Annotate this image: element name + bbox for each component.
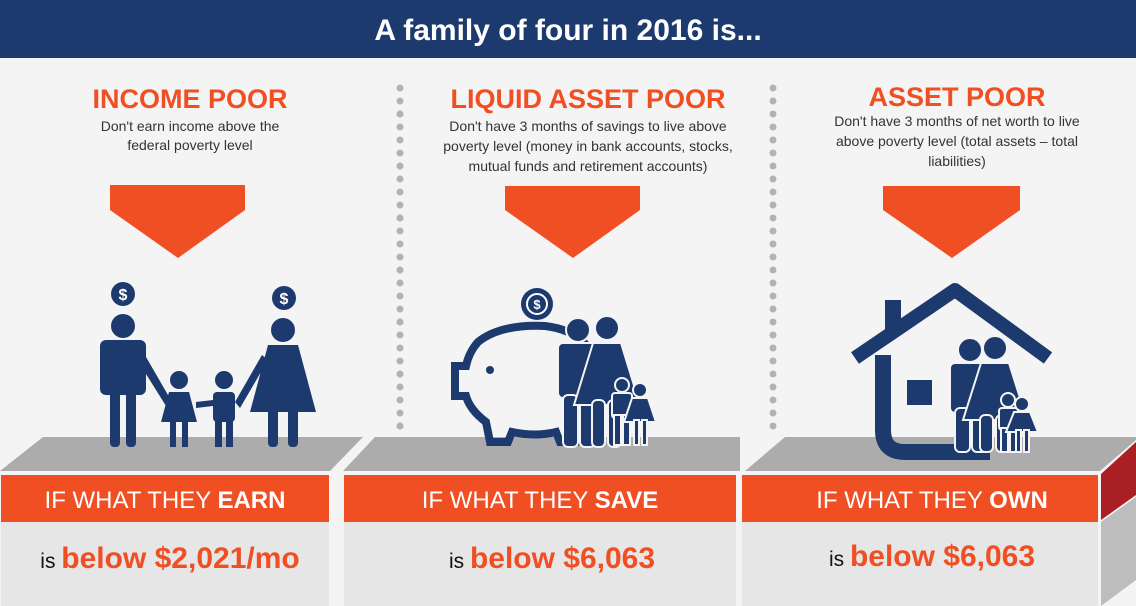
description: Don't earn income above the [101, 118, 279, 134]
box: own [742, 475, 1098, 606]
header [0, 0, 1136, 58]
panel: liquid asset poor: Don't have 3 months of savings to live above [449, 118, 727, 134]
icon: family [100, 282, 316, 447]
panel: income poor: federal poverty level [127, 137, 253, 153]
box: save [344, 475, 736, 606]
box: earn: is below $2,021/mo [40, 542, 300, 575]
icon: piggy bank with family: $ [533, 297, 541, 312]
dotted separators [396, 84, 776, 430]
panel: asset poor: Don't have 3 months of net worth to live [834, 113, 1080, 129]
panel: liquid asset poor: mutual funds and retirement accounts) [469, 158, 707, 174]
panel: liquid asset poor [443, 84, 733, 447]
panel: asset poor: above poverty level (total assets – total [836, 133, 1078, 149]
panel: liquid asset poor: poverty level (money in bank accounts, stocks, [443, 138, 733, 154]
arrow [110, 185, 245, 258]
heading: INCOME POOR [92, 84, 288, 114]
header: A family of four in 2016 is... [374, 14, 762, 47]
icon: family: $ [119, 287, 128, 304]
panel: asset poor: liabilities) [928, 153, 986, 169]
icon: house with family [855, 290, 1048, 452]
box: own: is below $6,063 [829, 540, 1035, 573]
platforms [0, 437, 1136, 606]
icon: piggy bank with family [455, 288, 656, 447]
box: earn: IF WHAT THEY EARN [45, 487, 285, 514]
box: own: IF WHAT THEY OWN [816, 487, 1048, 514]
icon: family: $ [280, 291, 289, 308]
box: save: IF WHAT THEY SAVE [422, 487, 658, 514]
box: save: is below $6,063 [449, 542, 655, 575]
panel: asset poor: ASSET POOR [868, 82, 1046, 112]
box: earn [1, 475, 329, 606]
panel: income poor [92, 84, 316, 447]
panel: liquid asset poor: LIQUID ASSET POOR [450, 84, 726, 114]
panel: asset poor [834, 82, 1080, 452]
